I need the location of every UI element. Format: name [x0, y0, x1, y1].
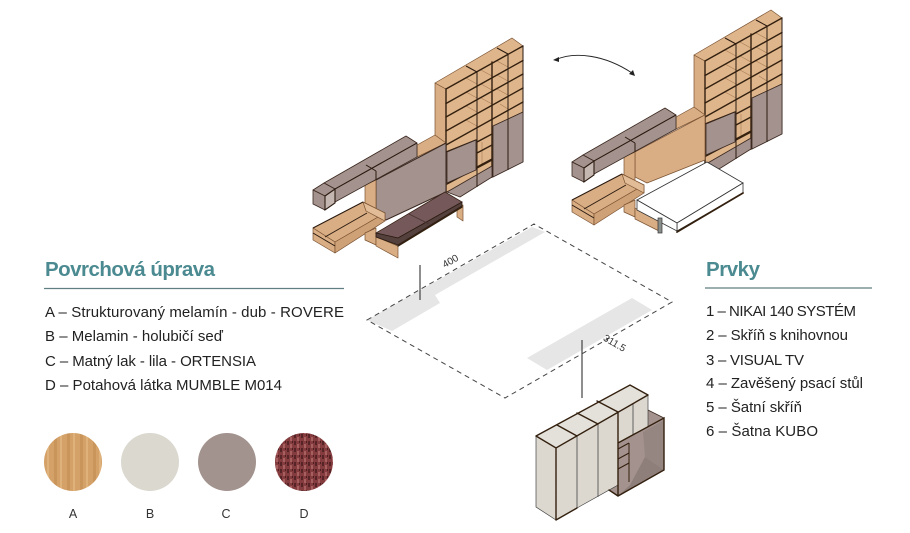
- finish list: [45, 304, 344, 394]
- base: [447, 166, 492, 197]
- wardrobe and walk-in closet: [536, 385, 664, 520]
- shelves: [618, 443, 629, 482]
- bookcase wall unit, right layout: [694, 10, 782, 169]
- closet side wall: [643, 420, 664, 470]
- swatch C: [198, 433, 256, 521]
- wardrobe top: [536, 385, 648, 448]
- wardrobe doors: [556, 412, 618, 520]
- uprights: [446, 62, 492, 192]
- bookcase wall unit, left layout: [435, 38, 523, 197]
- elements list: [706, 303, 863, 440]
- swatch D: D: [299, 507, 309, 521]
- doors: [493, 112, 523, 177]
- room zones: [367, 227, 545, 331]
- top face: [435, 38, 523, 89]
- hanging cabinet and desk, left layout: [313, 136, 417, 253]
- desk: [313, 202, 385, 242]
- finish list: B – Melamin - holubičí seď: [45, 328, 224, 345]
- support: [365, 180, 376, 213]
- dimension: depth: 311.5: [601, 333, 628, 355]
- finish list: D – Potahová látka MUMBLE M014: [45, 377, 282, 394]
- front face: [446, 46, 523, 192]
- tv panel: [447, 140, 476, 183]
- elements list: 2 – Skříň s knihovnou: [706, 327, 848, 344]
- finish list: C – Matný lak - lila - ORTENSIA: [45, 353, 256, 370]
- swatch B: [121, 433, 179, 521]
- oak headboard panel: [635, 107, 705, 183]
- swatch B: B: [146, 507, 154, 521]
- swatch A: A: [69, 507, 78, 521]
- swap arrow: [553, 55, 635, 76]
- frame: [577, 404, 633, 508]
- side panel: [435, 83, 446, 145]
- upper doors: [618, 395, 648, 443]
- floor plan: [367, 224, 672, 398]
- mauve headboard panel: [376, 135, 446, 220]
- elements list: 3 – VISUAL TV: [706, 352, 804, 369]
- long wall cabinet: [324, 136, 417, 189]
- elements list: 5 – Šatní skříň: [706, 399, 802, 416]
- finish swatches: [44, 433, 333, 521]
- elements list: 6 – Šatna KUBO: [706, 423, 818, 440]
- closet floor: [618, 457, 664, 496]
- wardrobe side: [536, 436, 556, 520]
- desk leg: [365, 228, 376, 245]
- elements list: 4 – Zavěšený psací stůl: [706, 375, 863, 392]
- upholstered bench: [376, 192, 463, 258]
- swatch A: [44, 433, 102, 521]
- heading: elements: Prvky: [706, 258, 761, 281]
- heading: surface finish: Povrchová úprava: [45, 258, 216, 281]
- swatch C: C: [221, 507, 231, 521]
- elements list: 1 – NIKAI 140 SYSTÉM: [706, 303, 856, 320]
- bed: [635, 162, 743, 233]
- open box: [313, 183, 335, 196]
- finish list: A – Strukturovaný melamín - dub - ROVERE: [45, 304, 344, 321]
- hanging cabinet and desk, right layout: [572, 108, 676, 225]
- swatch D: [275, 433, 333, 521]
- top dividers: [466, 48, 508, 72]
- closet back: [609, 410, 664, 496]
- shelves: [446, 46, 523, 184]
- dimension: width: 400: [441, 253, 461, 271]
- leader lines: [420, 265, 582, 398]
- room outline: [367, 224, 672, 398]
